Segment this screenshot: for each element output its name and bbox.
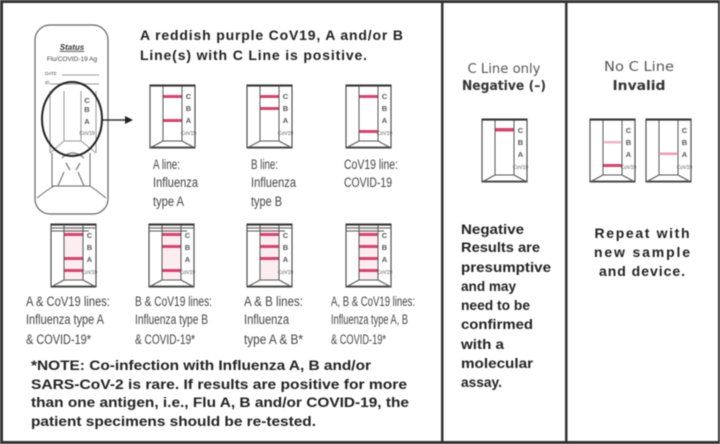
panel: invalid [590, 60, 692, 279]
cassette: A and CoV19: C [87, 231, 93, 240]
text: negative note: presumptive [461, 259, 551, 275]
cassette: invalid 2 [646, 119, 692, 182]
cassette: B and CoV19 [149, 224, 195, 287]
cassette: negative: A [518, 150, 524, 159]
cassette: B and CoV19: A [185, 255, 191, 264]
text: negative note: confirmed [461, 316, 533, 332]
label: A line: Influenza [153, 175, 198, 190]
cassette: invalid 1: B [626, 138, 632, 147]
label: B line [251, 157, 296, 209]
label: CoV19 line [344, 157, 398, 190]
text: negative note: with a [460, 336, 504, 352]
label: A line [153, 157, 198, 209]
label: B line: type B [251, 194, 282, 209]
cassette: A and B: B [283, 243, 289, 252]
text: negative note: assay. [461, 374, 502, 390]
label: A and CoV19: & COVID-19* [26, 332, 92, 347]
heading: positive: Line(s) with C Line is positive. [140, 47, 367, 63]
panel: negative [460, 62, 551, 390]
text: repeat instruction [594, 225, 690, 279]
label: CoV19 line: CoV19 line: [344, 157, 398, 172]
label: A and B: A & B lines: [244, 294, 303, 309]
cassette: CoV19 line: CoV19 [377, 131, 392, 137]
cassette: A line: B [186, 104, 192, 113]
note: co-infection: than one antigen, i.e., Flu A, B and/or COVID-19, the [31, 394, 409, 410]
cassette: A and B: C [283, 231, 289, 240]
icon: test device: DATE [45, 71, 57, 76]
icon: test device: ID [45, 80, 50, 85]
icon: test device: A [84, 117, 90, 126]
label: B and CoV19: Influenza type B [135, 312, 208, 327]
note: co-infection: SARS-CoV-2 is rare. If results are positive for more [31, 376, 407, 392]
panel: positive results [26, 25, 415, 429]
label: CoV19 line: COVID-19 [344, 175, 392, 190]
cassette: invalid 1 [590, 119, 636, 182]
label: A and B: Influenza [244, 312, 289, 327]
text: negative note: molecular [461, 355, 534, 371]
label: B and CoV19 [135, 294, 212, 347]
cassette: B line: C [283, 92, 289, 101]
cassette: A, B and CoV19: C [382, 231, 388, 240]
cassette: invalid 2: C [682, 126, 688, 135]
label: B line: B line: [251, 157, 278, 172]
cassette: invalid 2: CoV19 [677, 165, 692, 171]
cassette: CoV19 line: C [382, 92, 388, 101]
label: A, B and CoV19: & COVID-19* [331, 332, 387, 347]
cassette: A line: A [186, 116, 192, 125]
cassette: B line: CoV19 [278, 131, 293, 137]
heading: invalid [604, 60, 674, 94]
heading: positive [140, 27, 403, 63]
text: negative note [460, 221, 551, 390]
cassette: A and B: CoV19 [278, 270, 293, 276]
cassette: negative [482, 119, 528, 182]
cassette: invalid 2: B [682, 138, 688, 147]
cassette: A and CoV19: B [87, 243, 93, 252]
cassette: B and CoV19: C [185, 231, 191, 240]
icon: test device: CoV19 [79, 131, 95, 137]
cassette: A, B and CoV19 [346, 224, 392, 287]
cassette: A, B and CoV19: CoV19 [377, 270, 392, 276]
cassette: negative: C [518, 126, 524, 135]
heading: invalid: No C Line [604, 60, 674, 75]
label: A and B: type A & B* [244, 332, 304, 347]
label: B and CoV19: B & CoV19 lines: [135, 294, 212, 309]
cassette: B and CoV19: CoV19 [180, 270, 195, 276]
cassette: negative: B [518, 138, 524, 147]
cassette: A and B: A [283, 255, 289, 264]
cassette: CoV19 line [346, 85, 392, 148]
note: co-infection: patient specimens should be re-tested. [31, 413, 316, 429]
note: co-infection [31, 357, 409, 429]
label: A, B and CoV19 [331, 294, 415, 347]
cassette: A line [150, 85, 196, 148]
label: A and B [244, 294, 304, 347]
cassette: B line: A [283, 116, 289, 125]
cassette: A and CoV19: A [87, 255, 93, 264]
cassette: A, B and CoV19: A [382, 255, 388, 264]
icon: test device: Flu/COVID-19 Ag [47, 56, 97, 63]
text: negative note: Results are [461, 239, 540, 255]
label: B and CoV19: & COVID-19* [135, 332, 196, 347]
cassette: B and CoV19: B [185, 243, 191, 252]
icon: test device: B [84, 105, 90, 114]
text: repeat instruction: Repeat with [594, 225, 690, 241]
label: A line: A line: [153, 157, 180, 172]
cassette: A and CoV19 [51, 224, 97, 287]
cassette: CoV19 line: A [382, 116, 388, 125]
text: negative note: Negative [461, 221, 524, 237]
cassette: A line: CoV19 [181, 131, 196, 137]
cassette: invalid 2: A [682, 150, 688, 159]
heading: negative: Negative (–) [462, 79, 546, 94]
cassette: A, B and CoV19: B [382, 243, 388, 252]
cassette: A and CoV19: CoV19 [82, 270, 97, 276]
label: A, B and CoV19: A, B & CoV19 lines: [331, 294, 415, 309]
cassette: invalid 1: C [626, 126, 632, 135]
icon: magnifier ellipse [42, 82, 102, 156]
label: A line: type A [153, 194, 184, 209]
heading: positive: A reddish purple CoV19, A and/or B [140, 27, 403, 43]
cassette: invalid 1: A [626, 150, 632, 159]
label: A, B and CoV19: Influenza type A, B [331, 312, 408, 327]
cassette: B line [247, 85, 293, 148]
label: A and CoV19: A & CoV19 lines: [26, 294, 110, 309]
text: negative note: need to be [461, 297, 530, 313]
heading: invalid: Invalid [612, 79, 666, 94]
label: A and CoV19 [26, 294, 110, 347]
cassette: invalid 1: CoV19 [621, 165, 636, 171]
arrow [102, 116, 133, 124]
cassette: B line: B [283, 104, 289, 113]
cassette: A line: C [186, 92, 192, 101]
cassette: CoV19 line: B [382, 104, 388, 113]
icon: test device [35, 25, 108, 214]
text: negative note: and may [461, 278, 516, 294]
text: repeat instruction: and device. [599, 263, 685, 279]
cassette: A and B [247, 224, 293, 287]
heading: negative [462, 62, 546, 94]
heading: negative: C Line only [468, 62, 541, 77]
icon: test device: C [84, 96, 90, 105]
text: repeat instruction: new sample [594, 244, 690, 260]
icon: test device: Status [60, 43, 85, 52]
note: co-infection: *NOTE: Co-infection with Influenza A, B and/or [31, 357, 372, 373]
label: A and CoV19: Influenza type A [26, 312, 104, 327]
label: B line: Influenza [251, 175, 296, 190]
cassette: negative: CoV19 [513, 165, 528, 171]
